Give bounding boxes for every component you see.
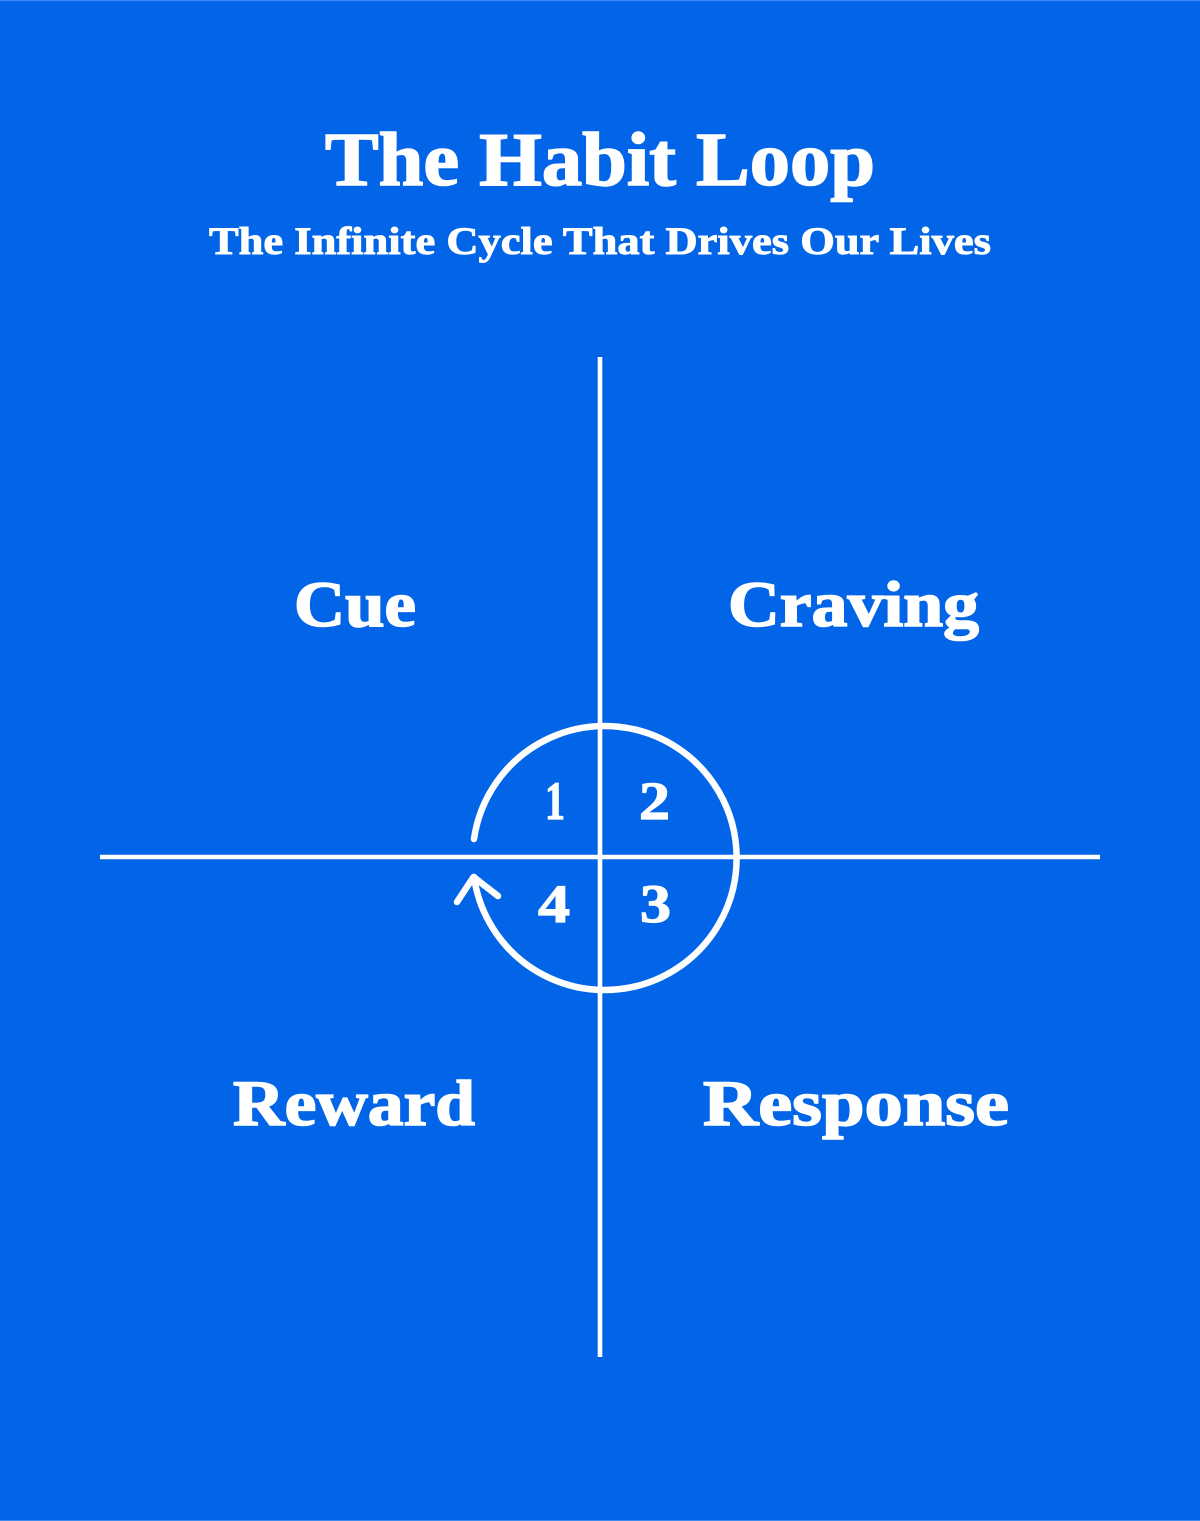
subtitle: The Infinite Cycle That Drives Our Lives (209, 220, 991, 263)
quadrant label: Cue: Cue (294, 569, 416, 641)
vertical axis (598, 357, 602, 1357)
quadrant label: Craving: Craving (728, 569, 979, 641)
step number 1: 1 (545, 771, 565, 831)
step number 4: 4 (538, 874, 570, 934)
loop arrow (457, 726, 737, 990)
step number 3: 3 (640, 874, 671, 934)
title: The Habit Loop (325, 118, 875, 202)
step number 2: 2 (639, 771, 670, 831)
horizontal axis (100, 855, 1100, 859)
quadrant label: Reward: Reward (233, 1068, 475, 1140)
quadrant label: Response: Response (703, 1068, 1009, 1140)
